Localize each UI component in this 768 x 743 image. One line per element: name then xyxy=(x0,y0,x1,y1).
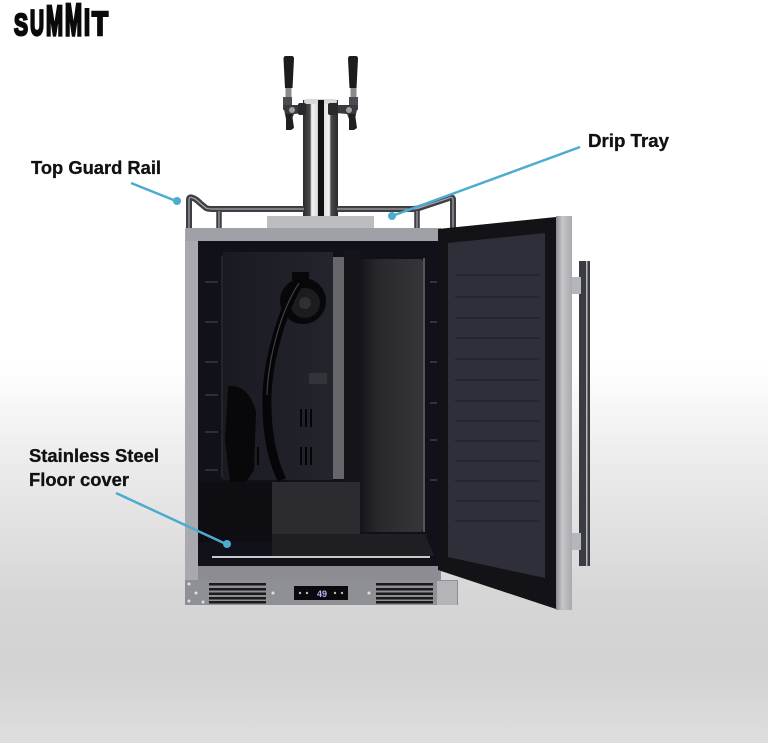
arrow: drip tray xyxy=(388,147,580,220)
beer tower xyxy=(283,56,358,216)
steel frame xyxy=(185,228,441,580)
back wall xyxy=(223,252,333,480)
door steel edge xyxy=(556,216,572,610)
floor front edge xyxy=(212,556,430,558)
label: Drip Tray: Drip Tray xyxy=(588,131,669,151)
wall label xyxy=(309,373,327,384)
door liner xyxy=(448,233,545,578)
right tap xyxy=(328,56,358,130)
label: Top Guard Rail xyxy=(31,158,181,205)
liner ridges xyxy=(455,275,540,521)
coiled bundle xyxy=(225,386,256,482)
label: Stainless Steel Floor cover: Stainless Steel xyxy=(29,446,159,466)
interior tank panel xyxy=(360,259,423,532)
compressor hump xyxy=(272,482,360,534)
label: Stainless Steel Floor cover: Floor cover xyxy=(29,470,129,490)
drip tray xyxy=(267,216,374,228)
logo: Summit: I xyxy=(84,3,90,44)
logo: Summit xyxy=(14,0,108,46)
control panel: 49 xyxy=(317,589,327,599)
left wall rails xyxy=(205,256,222,478)
right channel xyxy=(344,250,360,532)
divider strip xyxy=(333,257,344,479)
arrow: top guard rail xyxy=(131,183,181,205)
left vent xyxy=(209,583,266,604)
door back xyxy=(438,217,556,609)
left tap xyxy=(283,56,306,130)
hose xyxy=(267,281,300,480)
control panel xyxy=(294,586,348,600)
logo: Summit: S xyxy=(14,9,28,42)
label: Stainless Steel Floor cover xyxy=(29,446,231,548)
fridge cabinet xyxy=(185,228,441,580)
label: Top Guard Rail: Top Guard Rail xyxy=(31,158,161,178)
lower vent panel xyxy=(185,580,458,605)
floor cover xyxy=(272,534,434,556)
fan xyxy=(280,272,326,324)
interior xyxy=(198,241,439,566)
hinge xyxy=(437,581,457,605)
top guard rail xyxy=(189,197,453,228)
right wall rails xyxy=(430,282,437,480)
bottom band xyxy=(198,566,439,580)
handle xyxy=(572,261,590,566)
logo: Summit: U xyxy=(30,3,44,43)
tower column xyxy=(303,100,338,216)
right vent xyxy=(376,583,433,604)
arrow: floor cover xyxy=(116,493,231,548)
label: Drip Tray xyxy=(388,131,669,220)
open door xyxy=(438,216,590,610)
vents xyxy=(252,409,311,465)
logo: Summit: T xyxy=(92,5,108,43)
